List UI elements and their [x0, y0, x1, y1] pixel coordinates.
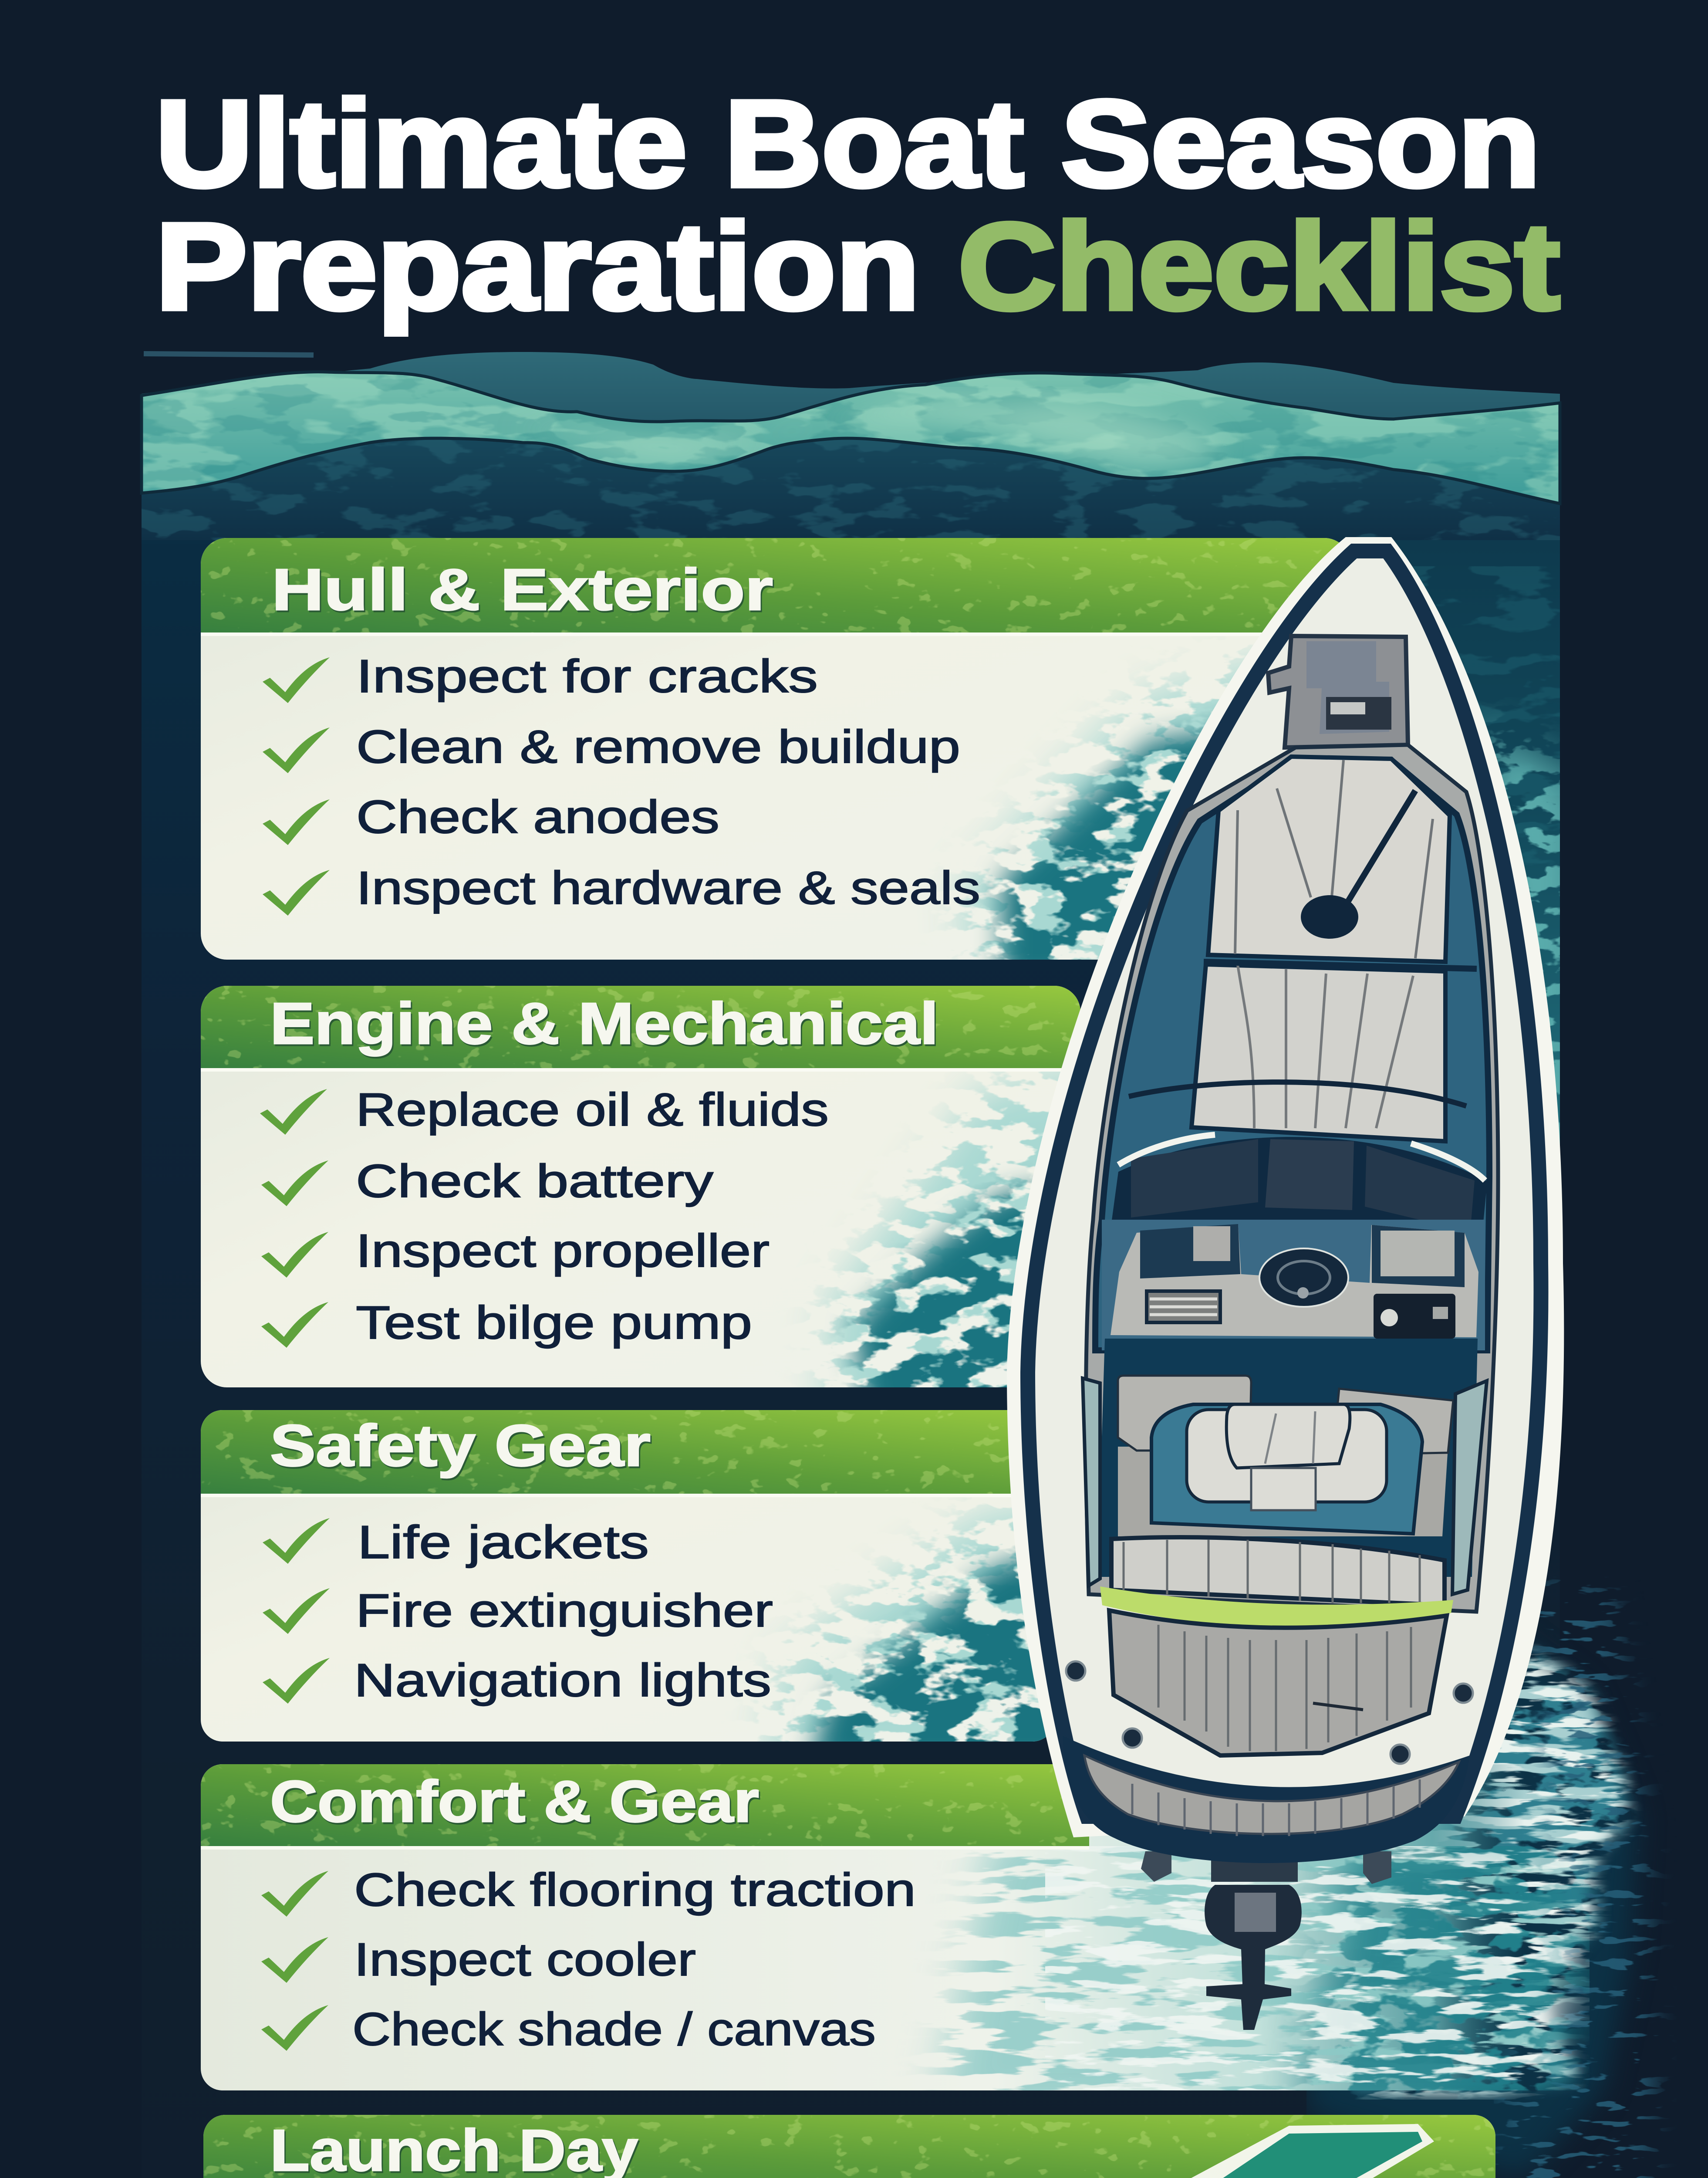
item: Test bilge pump: Test bilge pump: [356, 1296, 752, 1349]
heading: Hull & Exterior: [272, 557, 773, 622]
deck with rail: [1028, 551, 1541, 1816]
panel: Launch Day: [203, 2115, 1495, 2178]
item: Inspect cooler: [261, 1933, 696, 1985]
stern and swim platform: [1063, 1736, 1470, 1863]
cockpit interior blue: [1095, 759, 1489, 1350]
panel: Comfort & Gear: [201, 1764, 1590, 2090]
back wave: [142, 352, 1560, 523]
wave band outline: [142, 372, 1560, 504]
hull: [1007, 537, 1564, 1837]
item: Check flooring traction: [261, 1863, 916, 1917]
item: Replace oil & fluids: [260, 1083, 829, 1136]
panel: Safety Gear: [201, 1410, 1058, 1744]
title: [155, 75, 1560, 336]
card background: [203, 2115, 1495, 2178]
item: Navigation lights: Navigation lights: [354, 1654, 771, 1706]
dashboard: [1102, 1220, 1485, 1350]
background water panel: [142, 436, 1560, 2178]
item: Inspect for cracks: [263, 650, 818, 703]
item: Life jackets: [263, 1516, 649, 1568]
boat illustration: [1007, 537, 1564, 2030]
item: Check anodes: Check anodes: [356, 791, 719, 843]
panel: Hull & Exterior: [201, 538, 1350, 964]
top waves illustration: [142, 352, 1560, 540]
cockpit coaming: [1086, 745, 1498, 1612]
card background: [201, 986, 1089, 1390]
panel: Engine & Mechanical: [201, 986, 1089, 1390]
item: Inspect cooler: Inspect cooler: [354, 1933, 696, 1985]
card background: [201, 538, 1350, 964]
item: Inspect propeller: Inspect propeller: [356, 1224, 770, 1277]
item: Fire extinguisher: [263, 1584, 773, 1637]
distant wave streak: [144, 354, 314, 355]
item: Inspect hardware & seals: Inspect hardware & seals: [356, 862, 980, 914]
bow seat: [1208, 757, 1450, 962]
item: Check anodes: [263, 791, 719, 845]
item: Life jackets: Life jackets: [358, 1516, 649, 1568]
item: Check battery: [261, 1155, 714, 1207]
bench seat: [1111, 1537, 1445, 1605]
deep water beneath wave: [142, 436, 1560, 540]
title line 2: Preparation: [155, 198, 920, 336]
water right of boat: [1385, 540, 1560, 1416]
cleats: [1066, 1661, 1473, 1764]
wake spray right of stern: [1306, 1568, 1677, 2178]
lime stripe: [1100, 1586, 1453, 1627]
outboard engine: [1141, 1851, 1391, 2030]
middle seat: [1129, 962, 1477, 1141]
windshield panels: [1108, 1135, 1487, 1250]
item: Check shade / canvas: Check shade / canvas: [352, 2003, 876, 2055]
wake speckles trailing down: [1494, 1577, 1677, 2178]
teal band: [142, 366, 1560, 505]
item: Check flooring traction: Check flooring traction: [354, 1863, 916, 1916]
heading: Safety Gear: [270, 1413, 651, 1478]
card background: [201, 1764, 1590, 2090]
rear deck: [1109, 1610, 1447, 1755]
card background: [201, 1410, 1058, 1744]
bow hatch: [1268, 636, 1408, 747]
icon: cooler: [1168, 2124, 1445, 2178]
item: Fire extinguisher: Fire extinguisher: [356, 1584, 773, 1637]
item: Navigation lights: [263, 1654, 771, 1706]
cockpit floor and seating: [1097, 1339, 1478, 1577]
item: Check battery: Check battery: [356, 1155, 714, 1207]
title line 1: Ultimate Boat Season: [155, 75, 1540, 212]
item: Clean & remove buildup: Clean & remove buildup: [356, 720, 960, 773]
title accent word: Checklist: [958, 198, 1560, 335]
item: Inspect propeller: [261, 1224, 770, 1278]
item: Replace oil & fluids: Replace oil & fluids: [356, 1083, 829, 1136]
heading: Engine & Mechanical: [270, 991, 938, 1056]
side strips: [1083, 1378, 1487, 1594]
item: Test bilge pump: [261, 1296, 752, 1349]
heading: Comfort & Gear: [270, 1769, 759, 1834]
item: Inspect for cracks: Inspect for cracks: [356, 650, 818, 702]
